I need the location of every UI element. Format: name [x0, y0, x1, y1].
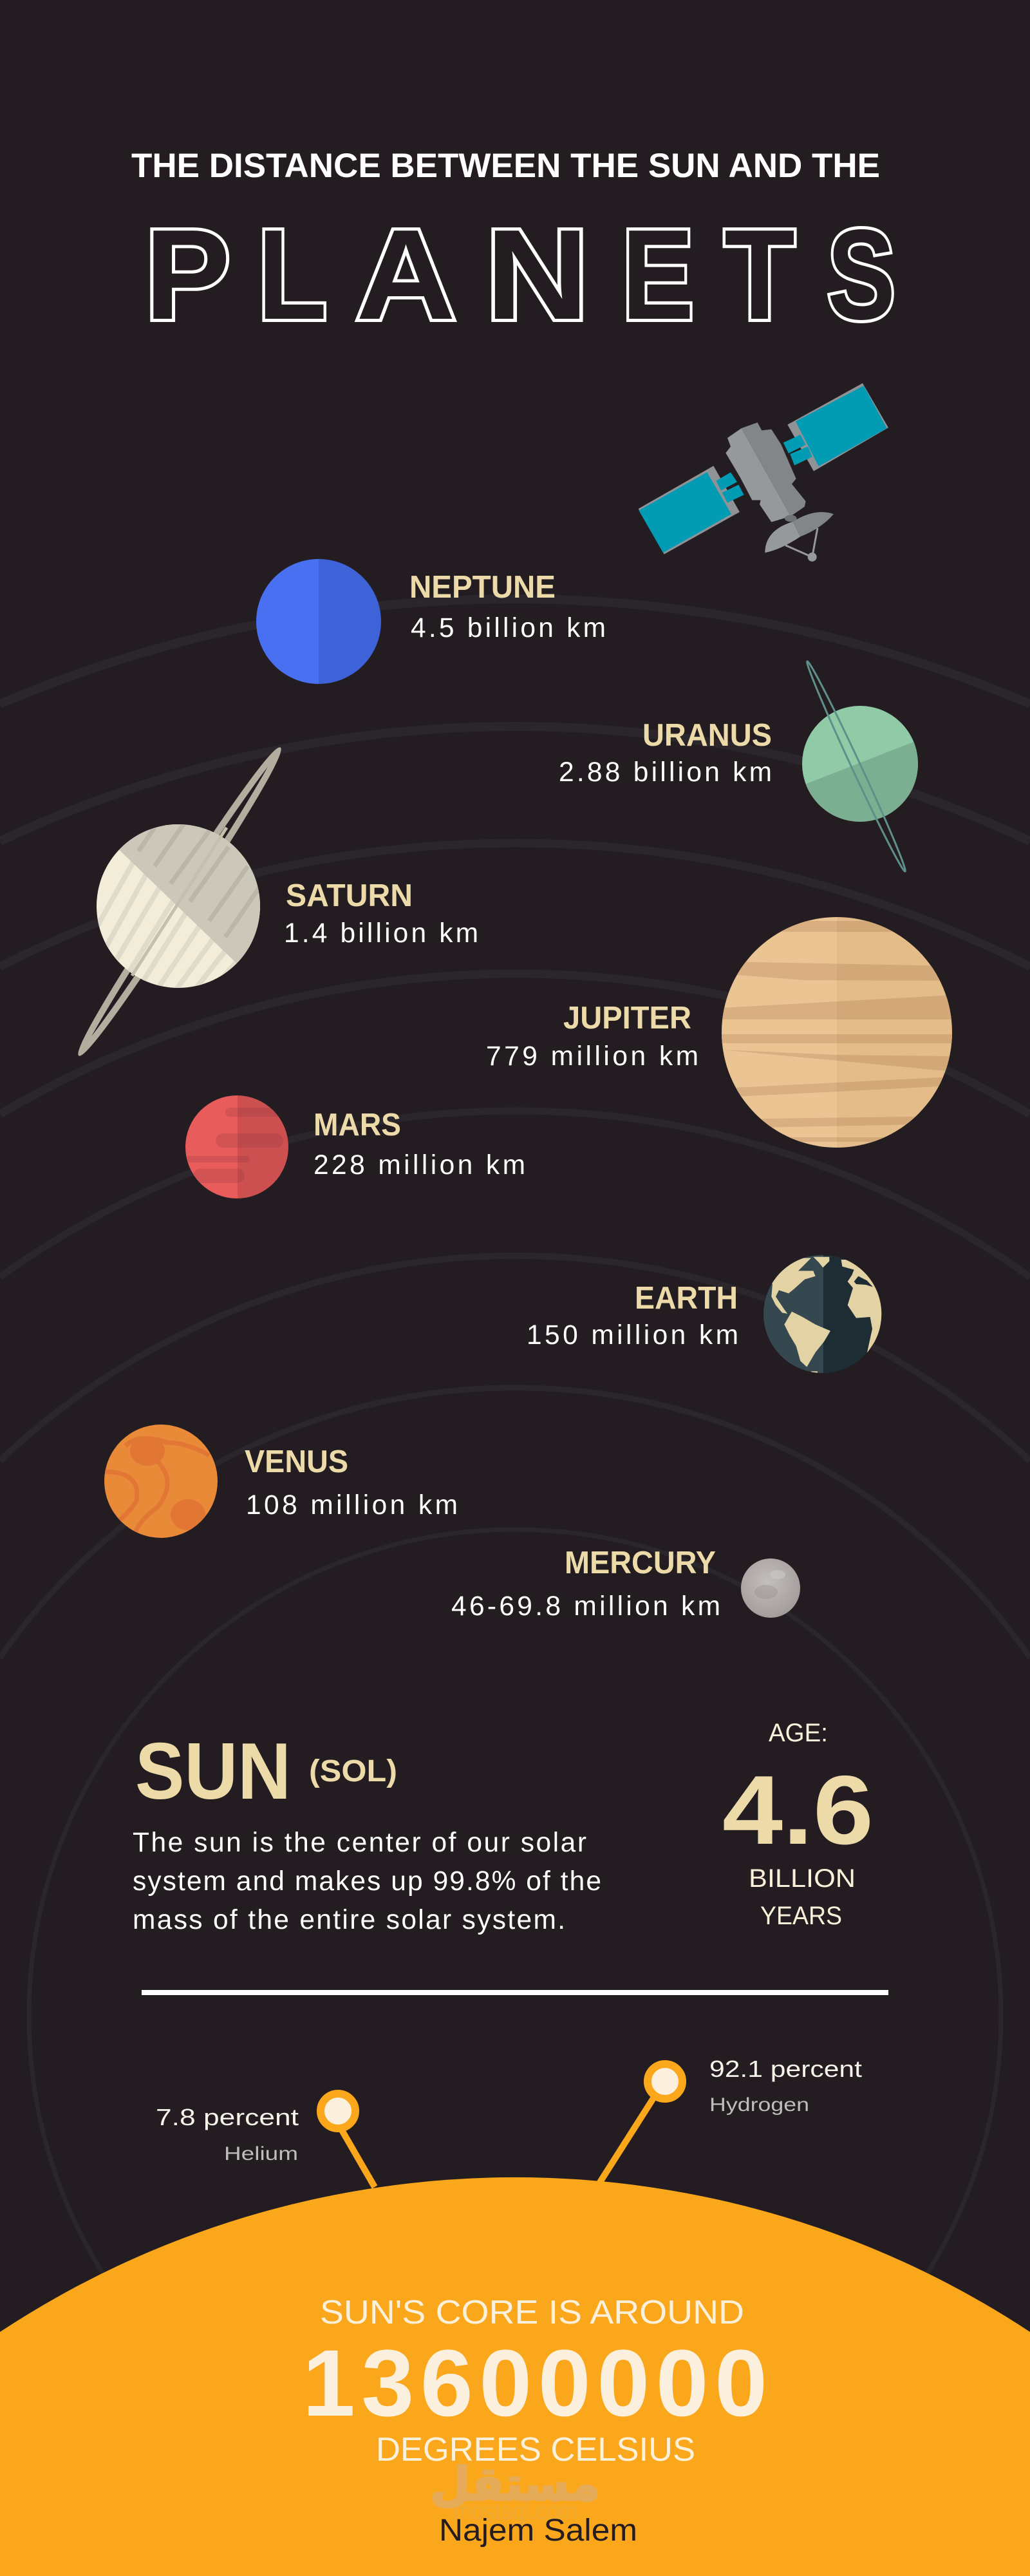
label: Neptune	[409, 570, 606, 643]
watermark: مستقل	[430, 2457, 600, 2511]
heading: Sun (Sol): SUN	[135, 1727, 291, 1816]
label: Jupiter: 779 million km	[486, 1041, 698, 1072]
callout: helium: Helium	[224, 2143, 298, 2164]
core temperature text: DEGREES CELSIUS	[376, 2431, 695, 2468]
label: Neptune: NEPTUNE	[409, 570, 556, 605]
label: Mercury: MERCURY	[565, 1546, 716, 1580]
label: Venus: 108 million km	[246, 1490, 458, 1520]
title: PLANETS outlined: E	[622, 204, 694, 346]
callout: helium	[156, 2094, 375, 2187]
orbit rings	[0, 599, 1030, 2502]
author name: Najem Salem	[439, 2514, 637, 2548]
text block: Sun description: system and makes up 99.8% of the	[133, 1866, 601, 1897]
title: PLANETS outlined	[145, 204, 895, 346]
planet: Uranus	[798, 659, 922, 873]
callout: helium: 7.8 percent	[156, 2104, 299, 2130]
label: Mercury	[451, 1546, 720, 1622]
label: Saturn: 1.4 billion km	[284, 918, 478, 949]
label: Earth	[527, 1281, 738, 1350]
label: Mars: 228 million km	[314, 1150, 525, 1180]
heading: Sun (Sol)	[135, 1727, 397, 1816]
text block: Sun description: mass of the entire solar system.	[133, 1905, 565, 1935]
label: Uranus: URANUS	[642, 718, 772, 753]
icon: satellite	[639, 383, 888, 562]
stat: age of the Sun	[722, 1719, 874, 1930]
label: Mercury: 46-69.8 million km	[451, 1591, 720, 1622]
title: PLANETS outlined: S	[827, 204, 895, 346]
planet: Jupiter	[721, 917, 953, 1148]
label: Saturn	[284, 878, 478, 949]
label: Neptune: 4.5 billion km	[411, 613, 606, 643]
core temperature text: 13600000	[303, 2331, 767, 2436]
title: PLANETS outlined: T	[724, 204, 795, 346]
planet: Mercury	[741, 1558, 800, 1618]
title: PLANETS outlined: P	[145, 204, 230, 346]
stat: age of the Sun: YEARS	[760, 1902, 842, 1930]
stat: age of the Sun: BILLION	[749, 1864, 856, 1893]
label: Mars	[314, 1108, 525, 1180]
label: Jupiter: JUPITER	[563, 1001, 691, 1036]
text block: Sun description: The sun is the center of our solar	[133, 1828, 586, 1858]
planet: Neptune	[256, 559, 381, 684]
callout: hydrogen: 92.1 percent	[709, 2056, 862, 2082]
callout: hydrogen	[599, 2056, 862, 2183]
sun disc	[0, 2177, 1030, 2576]
watermark: mostaql.com	[453, 2498, 577, 2525]
core temperature text: SUN'S CORE IS AROUND	[320, 2294, 744, 2331]
stat: age of the Sun: AGE:	[769, 1719, 828, 1747]
label: Earth: EARTH	[635, 1281, 738, 1316]
label: Venus	[245, 1444, 458, 1520]
label: Uranus	[559, 718, 772, 788]
planet: Saturn	[75, 746, 285, 1057]
text block: Sun description	[133, 1828, 601, 1935]
label: Earth: 150 million km	[527, 1320, 738, 1350]
label: Jupiter	[486, 1001, 698, 1072]
label: Venus: VENUS	[245, 1444, 348, 1479]
title: PLANETS outlined: A	[356, 204, 456, 346]
label: Saturn: SATURN	[286, 878, 413, 913]
planet: Earth	[762, 1254, 884, 1375]
title: PLANETS outlined: N	[485, 204, 589, 346]
callout: hydrogen: Hydrogen	[709, 2094, 809, 2116]
stat: age of the Sun: 4.6	[722, 1756, 874, 1865]
planet: Venus	[103, 1425, 218, 1542]
heading: Sun (Sol): (SOL)	[309, 1754, 397, 1788]
core temperature text	[303, 2294, 767, 2468]
label: Uranus: 2.88 billion km	[559, 757, 772, 788]
label: Mars: MARS	[314, 1108, 401, 1142]
title: PLANETS outlined: L	[258, 204, 327, 346]
planet: Mars	[185, 1095, 290, 1198]
title line: THE DISTANCE BETWEEN THE SUN AND THE	[131, 147, 880, 185]
